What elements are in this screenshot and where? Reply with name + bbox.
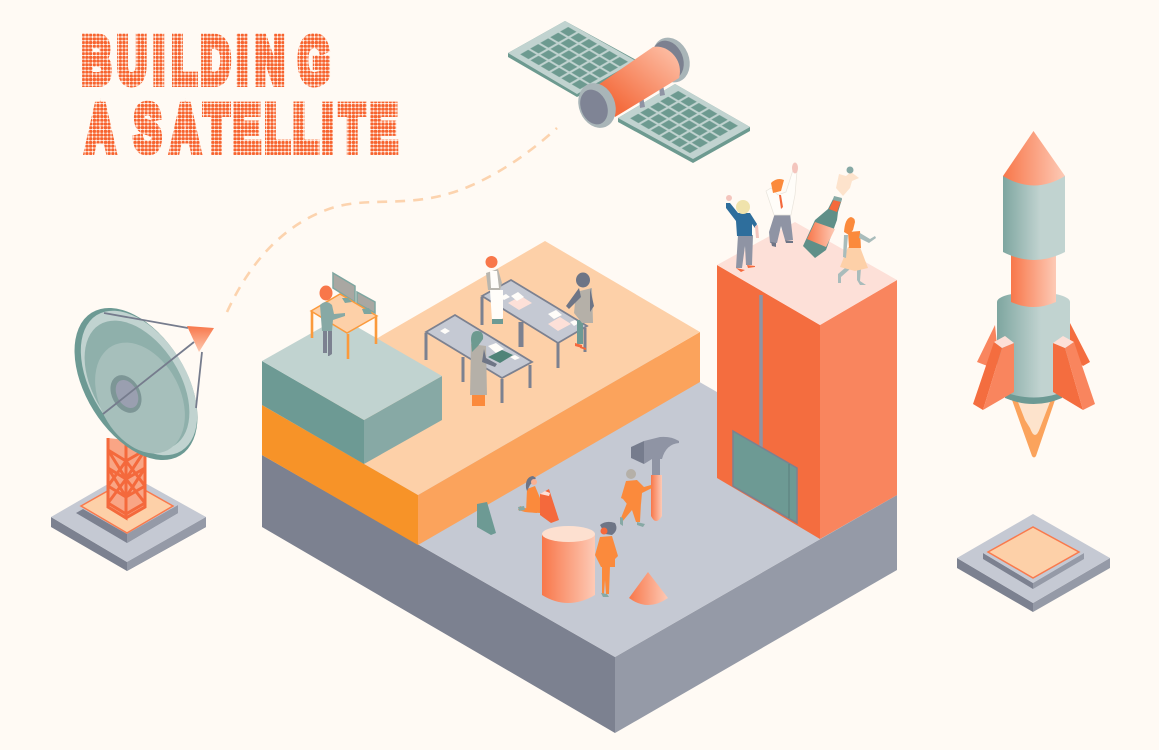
left fin — [973, 336, 1014, 410]
rocket — [973, 131, 1095, 458]
champagne bottle — [803, 196, 842, 258]
solar panel right — [618, 84, 750, 163]
isometric platform — [262, 241, 897, 733]
cylinder body — [598, 47, 680, 117]
desk — [311, 294, 377, 359]
champagne spray and cork — [836, 166, 859, 196]
lower body — [997, 292, 1070, 404]
satellite — [508, 21, 750, 163]
person right — [566, 272, 594, 350]
door — [733, 431, 797, 523]
title: A SATELLITE — [86, 91, 397, 165]
cylinder — [542, 526, 595, 603]
standing worker — [595, 522, 618, 597]
dish antenna — [49, 286, 223, 571]
worker — [320, 286, 345, 356]
dish — [49, 286, 223, 482]
front ring — [572, 77, 622, 134]
back fins — [977, 323, 1090, 367]
back table — [482, 280, 587, 368]
front table — [426, 315, 532, 403]
drafting tables — [426, 256, 594, 406]
nose cone — [1003, 131, 1065, 186]
orange block — [540, 489, 559, 523]
struts — [103, 313, 202, 414]
dashed signal path — [227, 128, 557, 312]
monitors — [333, 273, 375, 313]
person blue sweater — [726, 195, 759, 272]
middle orange layer — [262, 241, 700, 545]
worker with hammer — [620, 469, 652, 527]
teal block — [262, 317, 442, 464]
cone — [629, 572, 668, 605]
person dress — [838, 217, 876, 285]
right fin — [1053, 336, 1095, 410]
construction floor — [477, 437, 679, 605]
teal block — [477, 502, 496, 535]
solar panel left — [508, 21, 640, 97]
connector struts — [639, 85, 665, 108]
feed horn — [187, 326, 214, 352]
computer desk with worker — [311, 273, 377, 359]
left plinth — [51, 473, 206, 571]
back ring — [646, 32, 696, 88]
upper body — [1003, 176, 1065, 260]
tower building — [717, 222, 897, 539]
seam — [759, 295, 763, 450]
lattice tower — [108, 438, 145, 518]
base block — [262, 293, 897, 733]
rooftop celebration — [726, 162, 876, 285]
middle section — [1011, 250, 1056, 307]
title: BUILDING — [82, 23, 330, 97]
person white shirt — [766, 162, 798, 247]
rocket launch pad — [957, 514, 1110, 612]
hammer — [631, 437, 679, 521]
flame — [1012, 400, 1055, 458]
person front — [470, 331, 497, 406]
person white coat — [486, 256, 503, 324]
seated worker — [518, 476, 540, 513]
